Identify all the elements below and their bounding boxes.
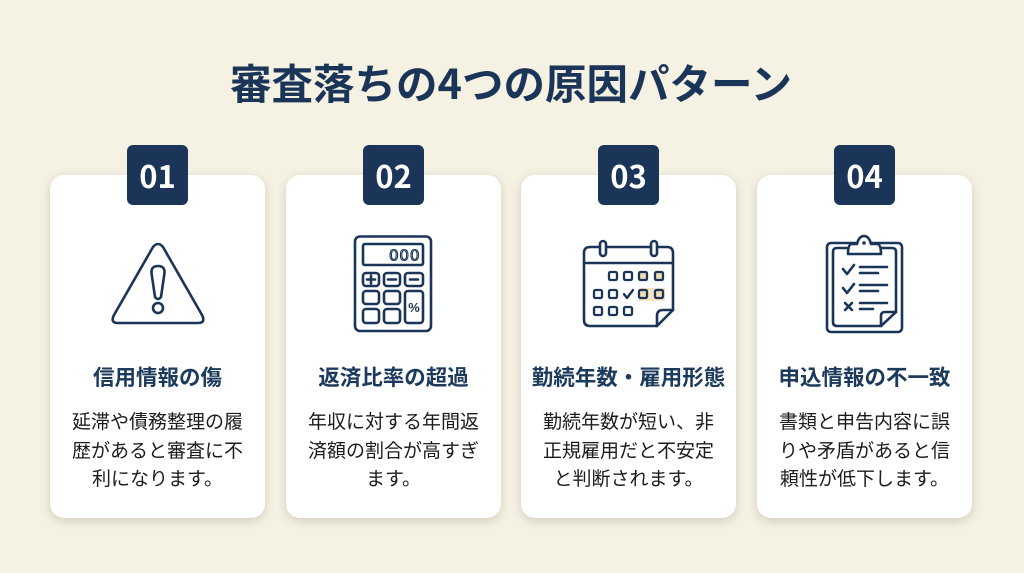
icon: calculator (355, 236, 431, 331)
number badge 04: 04 (846, 152, 883, 197)
text: card 3: 正規雇用だと不安定 (543, 440, 714, 462)
number badge 02 (363, 145, 424, 205)
title: 審査落ちの4つの原因パターン (230, 51, 792, 111)
icon: calendar (584, 241, 673, 326)
text: card 4: 頼性が低下します。 (780, 469, 949, 490)
text: card 1: 利になります。 (92, 469, 223, 490)
text: card 2: 済額の割合が高すぎ (308, 440, 479, 462)
text: card 3: 勤続年数が短い、非 (543, 412, 714, 433)
heading: card 2: 返済比率の超過 (318, 361, 469, 392)
panel: card 3 (521, 175, 736, 518)
text: card 3 (543, 412, 714, 490)
number badge 01 (127, 145, 188, 205)
icon: calculator: % (408, 300, 420, 315)
text: card 2: 年収に対する年間返 (308, 412, 479, 433)
panel: card 4 (757, 175, 972, 518)
number badge 01: 01 (139, 152, 176, 197)
text: card 1: 延滞や債務整理の履 (72, 412, 243, 433)
panel: card 1 (50, 175, 265, 518)
text: card 3: と判断されます。 (553, 469, 704, 490)
text: card 4: 書類と申告内容に誤 (779, 412, 950, 433)
text: card 4: りや矛盾があると信 (779, 440, 950, 462)
icon: clipboard checklist (827, 236, 902, 332)
number badge 02: 02 (375, 152, 412, 197)
heading: card 3: 勤続年数・雇用形態 (532, 361, 725, 392)
heading: card 1: 信用情報の傷 (93, 361, 222, 392)
number badge 04 (834, 145, 895, 205)
icon: warning triangle (113, 244, 203, 323)
text: card 1: 歴があると審査に不 (72, 440, 243, 462)
text: card 1 (72, 412, 243, 490)
text: card 2: ます。 (366, 469, 421, 490)
text: card 4 (779, 412, 950, 490)
number badge 03: 03 (610, 152, 647, 197)
icon: calculator: 000 (389, 248, 421, 264)
number badge 03 (598, 145, 659, 205)
panel: card 2 (286, 175, 501, 518)
text: card 2 (308, 412, 479, 490)
heading: card 4: 申込情報の不一致 (778, 361, 950, 392)
